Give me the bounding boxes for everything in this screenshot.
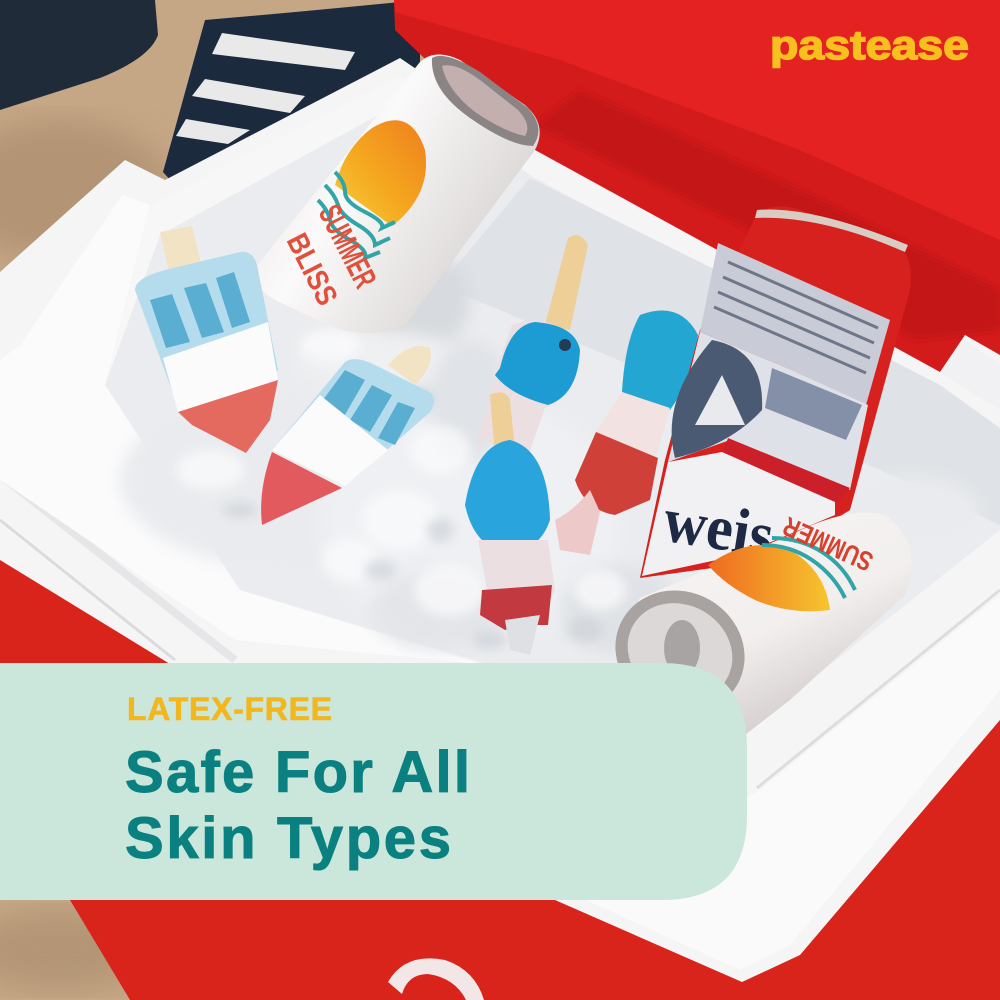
cooler interior <box>0 76 1000 740</box>
popsicle patch 1 <box>135 226 278 453</box>
sun logo <box>335 120 426 226</box>
striped towel <box>163 0 420 182</box>
popsicle 4 (right centre) <box>555 310 698 555</box>
cooler logo mark <box>388 958 484 1000</box>
dark shoe top left <box>0 0 158 110</box>
red cooler body bottom <box>0 560 1000 1000</box>
can: lying Summer Bliss <box>593 511 912 737</box>
can: Summer Bliss <box>254 54 540 333</box>
text panel <box>0 663 747 900</box>
red cooler lid <box>394 0 1000 420</box>
eyebrow: LATEX-FREE <box>127 691 332 727</box>
ice <box>120 250 980 655</box>
popsicle 5 (front) <box>465 392 555 655</box>
heading: Safe For All <box>125 740 470 805</box>
popsicle patch 2 <box>261 346 434 525</box>
logo: pastease <box>770 22 969 68</box>
heading: Skin Types <box>125 806 451 871</box>
can: Budweiser <box>640 206 911 578</box>
waves <box>318 172 395 258</box>
heading <box>125 740 470 871</box>
can label: SUMMER <box>312 199 384 294</box>
popsicle 3 (upper centre) <box>476 235 588 465</box>
can label text: weis <box>659 484 779 571</box>
can: Summer Bliss: BLISS <box>280 228 344 311</box>
can: lying Summer Bliss: SUMMER <box>778 511 877 577</box>
